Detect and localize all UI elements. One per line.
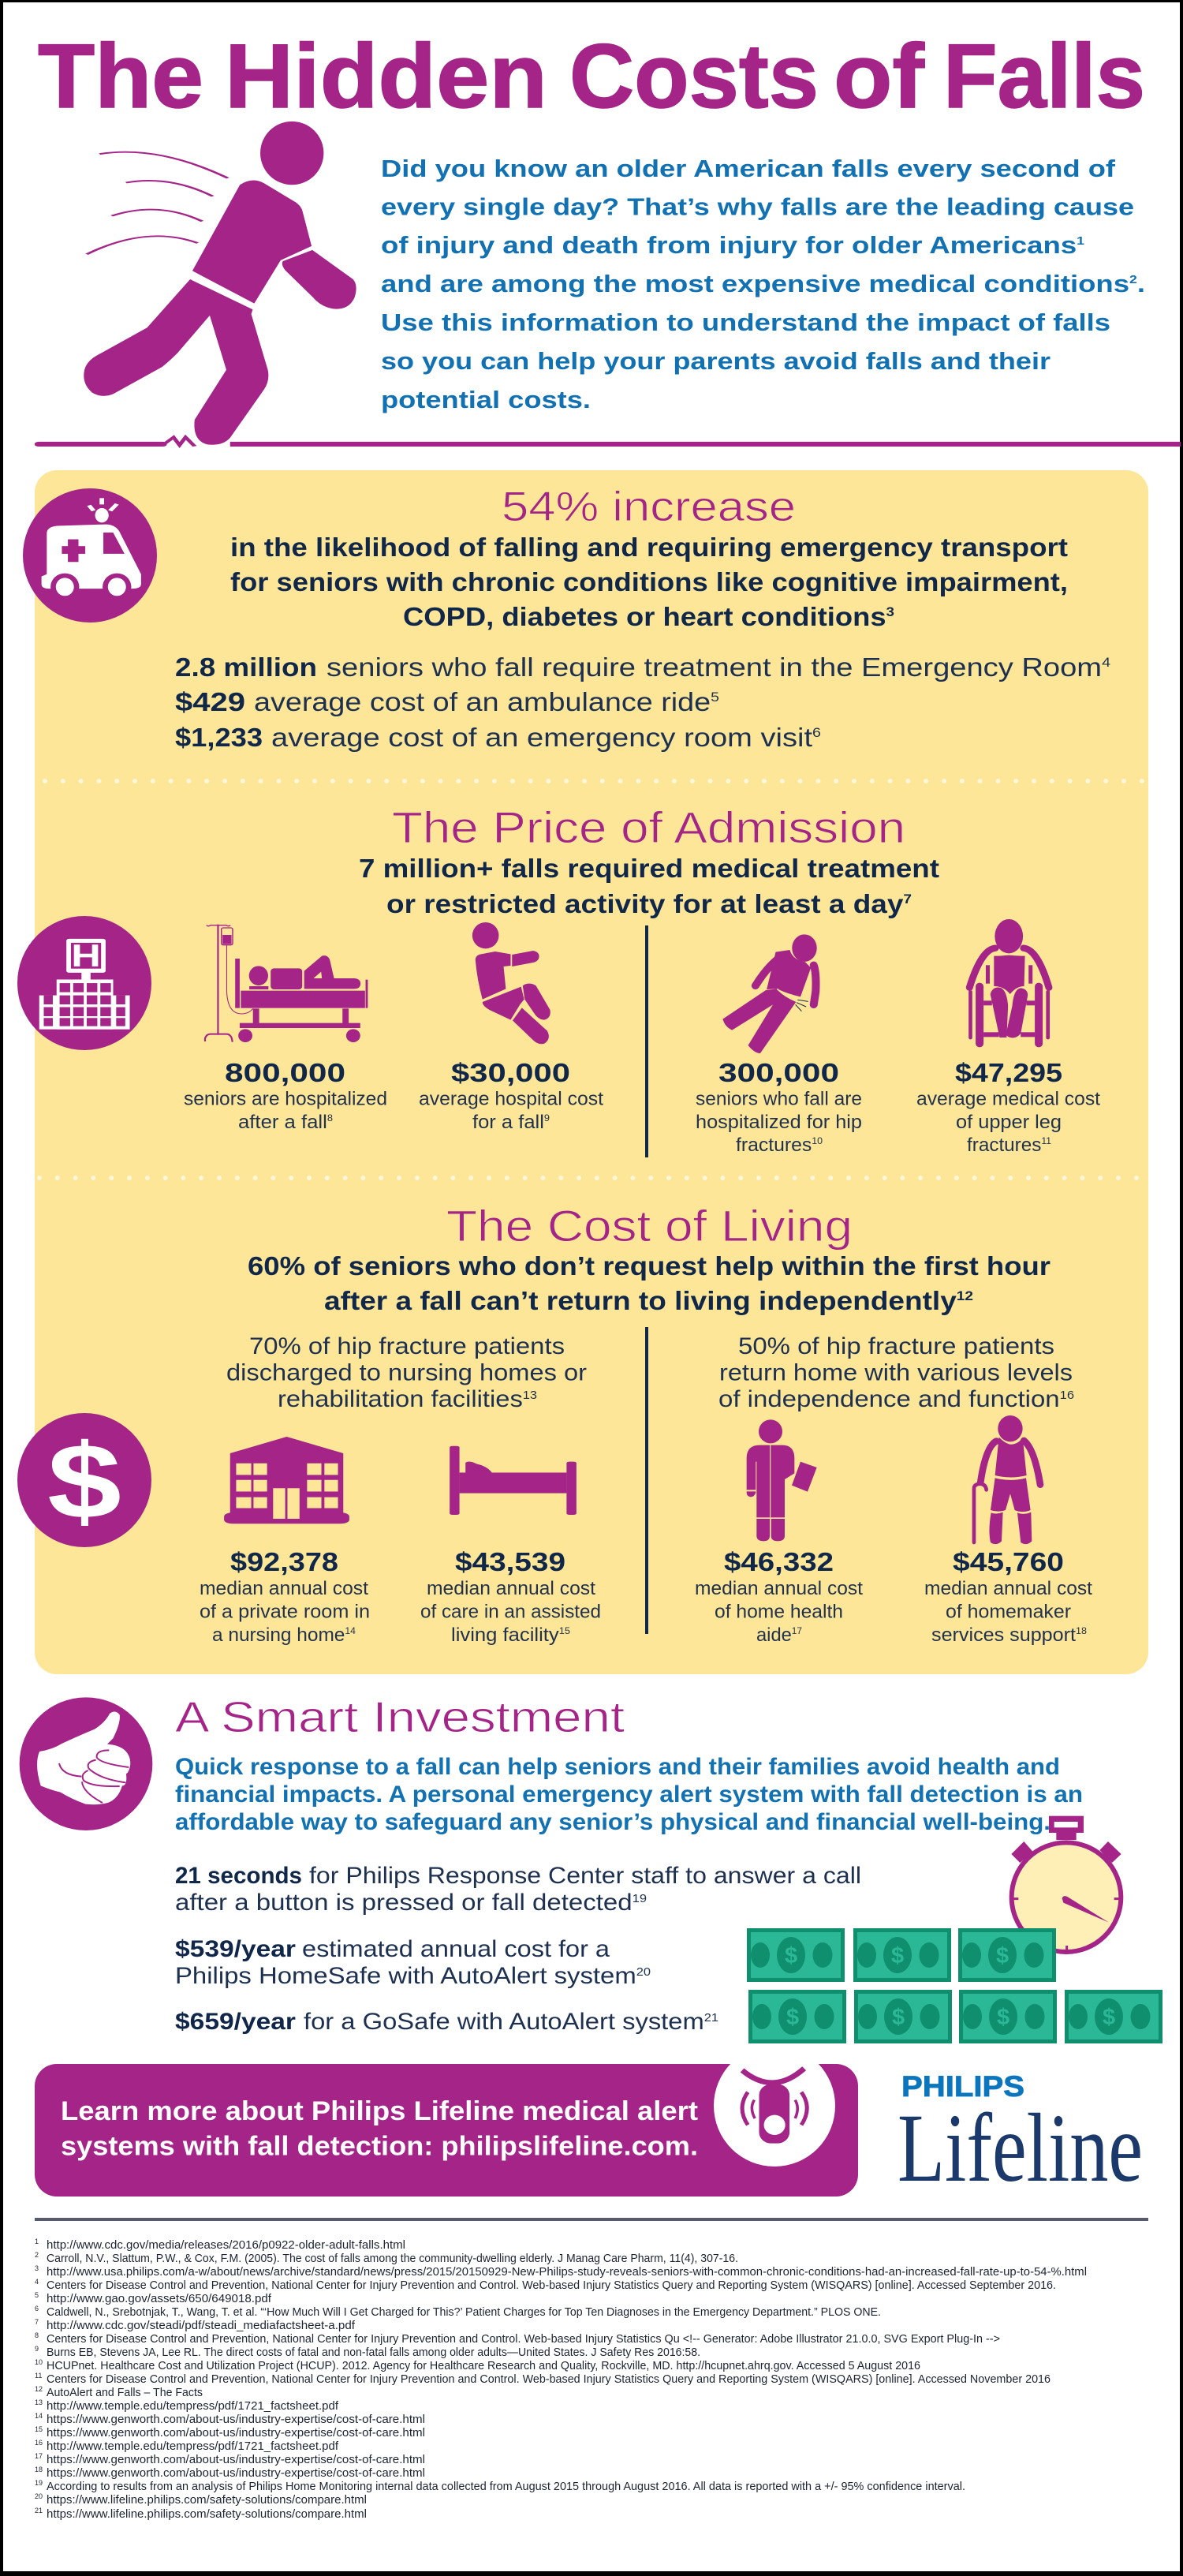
subheading: 60% of seniors [248,1251,1051,1315]
figures: facility costs: 14 [345,1625,356,1636]
figures: facility costs: 15 [559,1625,570,1636]
footnotes: 1 [35,2238,39,2245]
subheading: 7 million+ falls: or restricted activity for at least a day [386,889,848,918]
footnotes: https://www.lifeline.philips.com/safety-solutions/compare.html [47,2494,367,2507]
intro text: of injury and death from injury for older Americans [381,231,971,259]
figures: hospitalized columns: average hospital cost [419,1089,603,1109]
figures: home care costs: aide [756,1624,792,1646]
text: 70% of hip fracture patients: discharged to nursing homes or [226,1360,587,1385]
figures: home care costs: of home health [715,1602,843,1622]
footnotes: AutoAlert and Falls – The Facts [47,2387,203,2399]
footnotes: http://www.cdc.gov/steadi/pdf/steadi_mediafactsheet-a.pdf [47,2320,356,2332]
panel: yellow background [35,470,1148,1674]
figures: hip fracture columns: of upper leg [956,1112,1062,1133]
stats: emergency costs: seniors who fall require treatment in the Emergency Room [327,652,998,682]
text: 50% of hip fracture patients: 16 [1060,1389,1074,1402]
figures: hip fracture columns: 11 [1041,1135,1051,1146]
footnotes: 11 [35,2372,42,2380]
title: Costs [569,26,819,127]
text: $659 per year: $659/year [175,2009,296,2035]
footnotes: Centers for Disease Control and Prevention, National Center for Injury Prevention and Control. Web-based Injury Statistics Query and Reporting System (WISQARS) [online]. Accessed September 2016. [47,2279,1056,2292]
footnotes: 18 [35,2466,43,2473]
subheading: emergency transport: COPD, diabetes or heart conditions [403,602,842,631]
subheading: emergency transport: 3 [886,604,894,619]
text: $539 per year: Philips HomeSafe with AutoAlert system [175,1963,596,1989]
icon: stack of dollar bills: $ [1103,2005,1115,2030]
footnotes: https://www.genworth.com/about-us/industry-expertise/cost-of-care.html [47,2454,425,2466]
footnotes: 6 [35,2305,39,2312]
subheading: 7 million+ falls [359,854,939,918]
text: 21 seconds: 19 [633,1892,647,1905]
text: 70% of hip fracture patients: 70% of hip fracture patients [249,1333,565,1359]
text: $539 per year: estimated annual cost for a [302,1936,610,1962]
text: quick response: affordable way to safeguard any senior’s physical and financial well-being. [175,1809,1051,1835]
stats: emergency costs: 4 [1102,655,1110,670]
footnotes: https://www.genworth.com/about-us/industry-expertise/cost-of-care.html [47,2413,425,2426]
icon: thumbs up circle [20,1697,152,1830]
icon: stack of dollar bills: $ [997,2005,1009,2030]
footnotes: Caldwell, N., Srebotnjak, T., Wang, T. et al. “‘How Much Will I Get Charged for This?’ Patient Charges for Top Ten Diagnoses in the Emergency Department.” PLOS ONE. [47,2306,881,2319]
footnotes: 14 [35,2412,43,2420]
text: $539 per year [175,1936,651,1989]
footnotes: 5 [35,2291,39,2299]
figures: hip fracture columns [696,1058,1100,1156]
subheading: 7 million+ falls: 7 million+ falls required medical treatment [359,854,939,883]
text: quick response: Quick response to a fall can help seniors and their families avoid health and [175,1754,1060,1780]
footnotes: 7 [35,2318,39,2326]
intro text: potential costs. [381,386,591,413]
footnotes: Centers for Disease Control and Prevention, National Center for Injury Prevention and Control. Web-based Injury Statistics Qu <!-- Generator: Adobe Illustrator 21.0.0, SVG Export Plug-In --> [47,2333,1000,2346]
heading: 54% increase: 54% increase [502,484,796,530]
figures: facility costs: of care in an assisted [420,1602,601,1622]
callout: learn more banner: systems with fall detection: philipslifeline.com. [61,2132,698,2162]
footnotes: 2 [35,2251,39,2259]
footnotes: Burns EB, Stevens JA, Lee RL. The direct costs of fatal and non-fatal falls among older adults—United States. J Safety Res 2016:58. [47,2346,700,2359]
icon: stack of dollar bills: $ [785,1943,797,1968]
footnotes: http://www.usa.philips.com/a-w/about/news/archive/standard/news/press/2015/20150929-New-Philips-study-reveals-seniors-with-common-chronic-conditions-had-an-increased-fall-rate-up-to-54-%.html [47,2266,1087,2279]
intro text: so you can help your parents avoid falls and their [381,347,1051,375]
figures: home care costs: $46,332 [724,1547,834,1576]
figures: home care costs: services support [931,1624,1069,1646]
figures: facility costs: $43,539 [455,1547,565,1576]
figures: hip fracture columns: fractures [736,1135,809,1156]
icon: person in wheelchair [968,919,1050,1047]
figures: hip fracture columns: hospitalized for hip [696,1112,862,1133]
text: $659 per year [175,2009,718,2035]
intro text: every single day? That’s why falls are the leading cause [381,193,1134,221]
intro text: 2 [1129,273,1137,286]
text: 21 seconds: after a button is pressed or fall detected [175,1890,591,1916]
icon: stopwatch [1011,1816,1121,1952]
footnotes: 15 [35,2425,43,2433]
footnotes: https://www.genworth.com/about-us/industry-expertise/cost-of-care.html [47,2427,425,2440]
logo: Philips Lifeline: PHILIPS [901,2070,1024,2103]
icon: bed [450,1446,577,1515]
footnotes [35,2238,1087,2521]
stats: emergency costs: $1,233 [175,723,263,752]
text: 50% of hip fracture patients: return home with various levels [719,1360,1073,1385]
footnotes: 12 [35,2385,43,2393]
text: $539 per year: $539/year [175,1936,296,1962]
intro text: 1 [1077,234,1084,248]
subheading: emergency transport [230,533,1068,631]
stats: emergency costs: average cost of an ambulance ride [254,687,653,716]
title: Falls [943,26,1145,127]
icon: dollar circle: $ [47,1422,121,1541]
stats: emergency costs [175,652,1110,752]
icon: stack of dollar bills: $ [891,1943,904,1968]
icon: stack of dollar bills [747,1928,1162,2043]
figures: hospitalized columns: after a fall [238,1112,321,1133]
subheading: 60% of seniors: 12 [957,1288,973,1303]
footnotes: According to results from an analysis of Philips Home Monitoring internal data collected from August 2015 through August 2016. All data is reported with a +/- 95% confidence interval. [47,2481,965,2493]
footnotes: HCUPnet. Healthcare Cost and Utilization Project (HCUP). 2012. Agency for Healthcare Research and Quality, Rockville, MD. http://hcupnet.ahrq.gov. Accessed 5 August 2016 [47,2360,920,2372]
title [38,26,1145,127]
figures: hip fracture columns: 10 [812,1135,823,1146]
intro text [381,155,1145,413]
divider: price of admission [645,925,648,1157]
figures: hospitalized columns [184,1058,603,1133]
figures: facility costs: median annual cost [200,1578,368,1599]
footnotes: https://www.genworth.com/about-us/industry-expertise/cost-of-care.html [47,2467,425,2480]
figures: hospitalized columns: 8 [327,1112,333,1123]
text: 21 seconds [175,1863,861,1916]
icon: person with hip fracture [722,934,817,1053]
figures: home care costs: median annual cost [695,1578,863,1599]
stats: emergency costs: 5 [711,690,719,705]
figures: hospitalized columns: seniors are hospitalized [184,1089,387,1109]
intro text: . [1137,270,1145,297]
figures: hospitalized columns: $30,000 [451,1058,570,1087]
figures: hip fracture columns: seniors who fall are [696,1089,862,1109]
stats: emergency costs: 6 [812,725,821,740]
title: The [38,26,203,127]
icon: nursing home building [224,1437,349,1524]
icon: ambulance circle [23,488,157,623]
icon: patient in hospital bed [205,925,368,1042]
footnotes: 19 [35,2479,43,2487]
footnotes: 13 [35,2398,43,2406]
figures: hip fracture columns: average medical cost [916,1089,1100,1109]
footnotes: 10 [35,2358,43,2366]
footnotes: 20 [35,2492,43,2500]
text: $539 per year: 20 [636,1965,651,1979]
heading: The Cost of Living: The Cost of Living [446,1201,853,1251]
heading: The Price of Admission: The Price of Admission [392,802,905,852]
footnotes: http://www.temple.edu/tempress/pdf/1721_factsheet.pdf [47,2440,339,2453]
footnotes: 21 [35,2507,43,2514]
icon: senior with cane [974,1415,1040,1544]
figures: home care costs [695,1547,1092,1646]
subheading: 60% of seniors: after a fall can’t return to living independently [324,1286,888,1315]
icon: dollar circle [17,1413,151,1547]
callout: learn more banner [35,2064,858,2197]
text: quick response: financial impacts. A personal emergency alert system with fall detection is an [175,1782,1083,1808]
icon: stack of dollar bills: $ [892,2005,905,2030]
footnotes: 8 [35,2331,39,2339]
footnotes: Carroll, N.V., Slattum, P.W., & Cox, F.M. (2005). The cost of falls among the community-dwelling elderly. J Manag Care Pharm, 11(4), 307-16. [47,2253,738,2265]
text: 50% of hip fracture patients: of independence and function [718,1386,1029,1412]
figures: hip fracture columns: 300,000 [718,1058,839,1087]
icon: stack of dollar bills: $ [996,1943,1009,1968]
figures: hip fracture columns: $47,295 [955,1058,1062,1087]
intro text: and are among the most expensive medical conditions [381,270,1017,297]
footnotes: https://www.lifeline.philips.com/safety-solutions/compare.html [47,2508,367,2521]
icon: hospital circle [17,916,151,1050]
footnotes: 3 [35,2264,39,2272]
figures: home care costs: 17 [792,1625,802,1636]
text: 21 seconds: for Philips Response Center staff to answer a call [309,1863,861,1889]
subheading: emergency transport: for seniors with chronic conditions like cognitive impairment, [230,567,1068,596]
divider: cost of living [645,1327,648,1634]
title: of [834,26,925,127]
subheading: emergency transport: in the likelihood of falling and requiring emergency transport [230,533,1068,562]
stats: emergency costs: $429 [175,687,245,716]
figures: hospitalized columns: for a fall [472,1112,539,1133]
intro text: Use this information to understand the impact of falls [381,308,1110,336]
subheading: 60% of seniors: 60% of seniors who don’t request help within the first hour [248,1251,1051,1281]
icon: stack of dollar bills: $ [786,2005,799,2030]
footnotes: 17 [35,2452,43,2460]
figures: hip fracture columns: fractures [967,1135,1040,1156]
figures: hospitalized columns: 800,000 [225,1058,345,1087]
footnotes: 16 [35,2439,43,2447]
text: 21 seconds: 21 seconds [175,1863,302,1889]
figures: home care costs: 18 [1076,1625,1087,1636]
text: 70% of hip fracture patients: 13 [523,1389,537,1402]
text: 70% of hip fracture patients: rehabilitation facilities [278,1386,502,1412]
subheading: 7 million+ falls: 7 [903,892,912,907]
figures: facility costs: of a private room in [200,1602,370,1622]
footnotes: http://www.temple.edu/tempress/pdf/1721_factsheet.pdf [47,2400,339,2413]
footnotes: 4 [35,2278,39,2286]
figures: facility costs: $92,378 [230,1547,338,1576]
figures: facility costs: median annual cost [427,1578,595,1599]
intro text: Did you know an older American falls every second of [381,155,1116,182]
text: 50% of hip fracture patients: 50% of hip fracture patients [738,1333,1054,1359]
figures: hospitalized columns: 9 [544,1112,550,1123]
stats: emergency costs: 2.8 million [175,652,317,682]
figures: home care costs: of homemaker [946,1602,1071,1622]
footnotes: http://www.cdc.gov/media/releases/2016/p0922-older-adult-falls.html [47,2239,405,2252]
text: 50% of hip fracture patients [718,1333,1074,1412]
title: Hidden [225,26,547,127]
text: $659 per year: for a GoSafe with AutoAlert system [304,2009,670,2035]
icon: home health aide [747,1419,817,1541]
figures: facility costs [200,1547,601,1646]
figures: facility costs: a nursing home [212,1624,342,1646]
text: quick response [175,1754,1083,1835]
footnotes: Centers for Disease Control and Prevention, National Center for Injury Prevention and Control. Web-based Injury Statistics Query and Reporting System (WISQARS) [online]. Accessed November 2016 [47,2373,1051,2386]
heading: A Smart Investment: A Smart Investment [175,1692,625,1741]
footnotes: http://www.gao.gov/assets/650/649018.pdf [47,2293,272,2305]
figures: home care costs: median annual cost [924,1578,1092,1599]
figures: home care costs: $45,760 [953,1547,1064,1576]
icon: falling person [35,122,1181,447]
stats: emergency costs: average cost of an emergency room visit [271,723,740,752]
text: $659 per year: 21 [704,2011,718,2025]
text: 70% of hip fracture patients [226,1333,587,1412]
callout: learn more banner: Learn more about Philips Lifeline medical alert [61,2096,698,2126]
icon: person falling backwards [472,922,550,1044]
footnotes: 9 [35,2345,39,2353]
figures: facility costs: living facility [451,1624,552,1646]
